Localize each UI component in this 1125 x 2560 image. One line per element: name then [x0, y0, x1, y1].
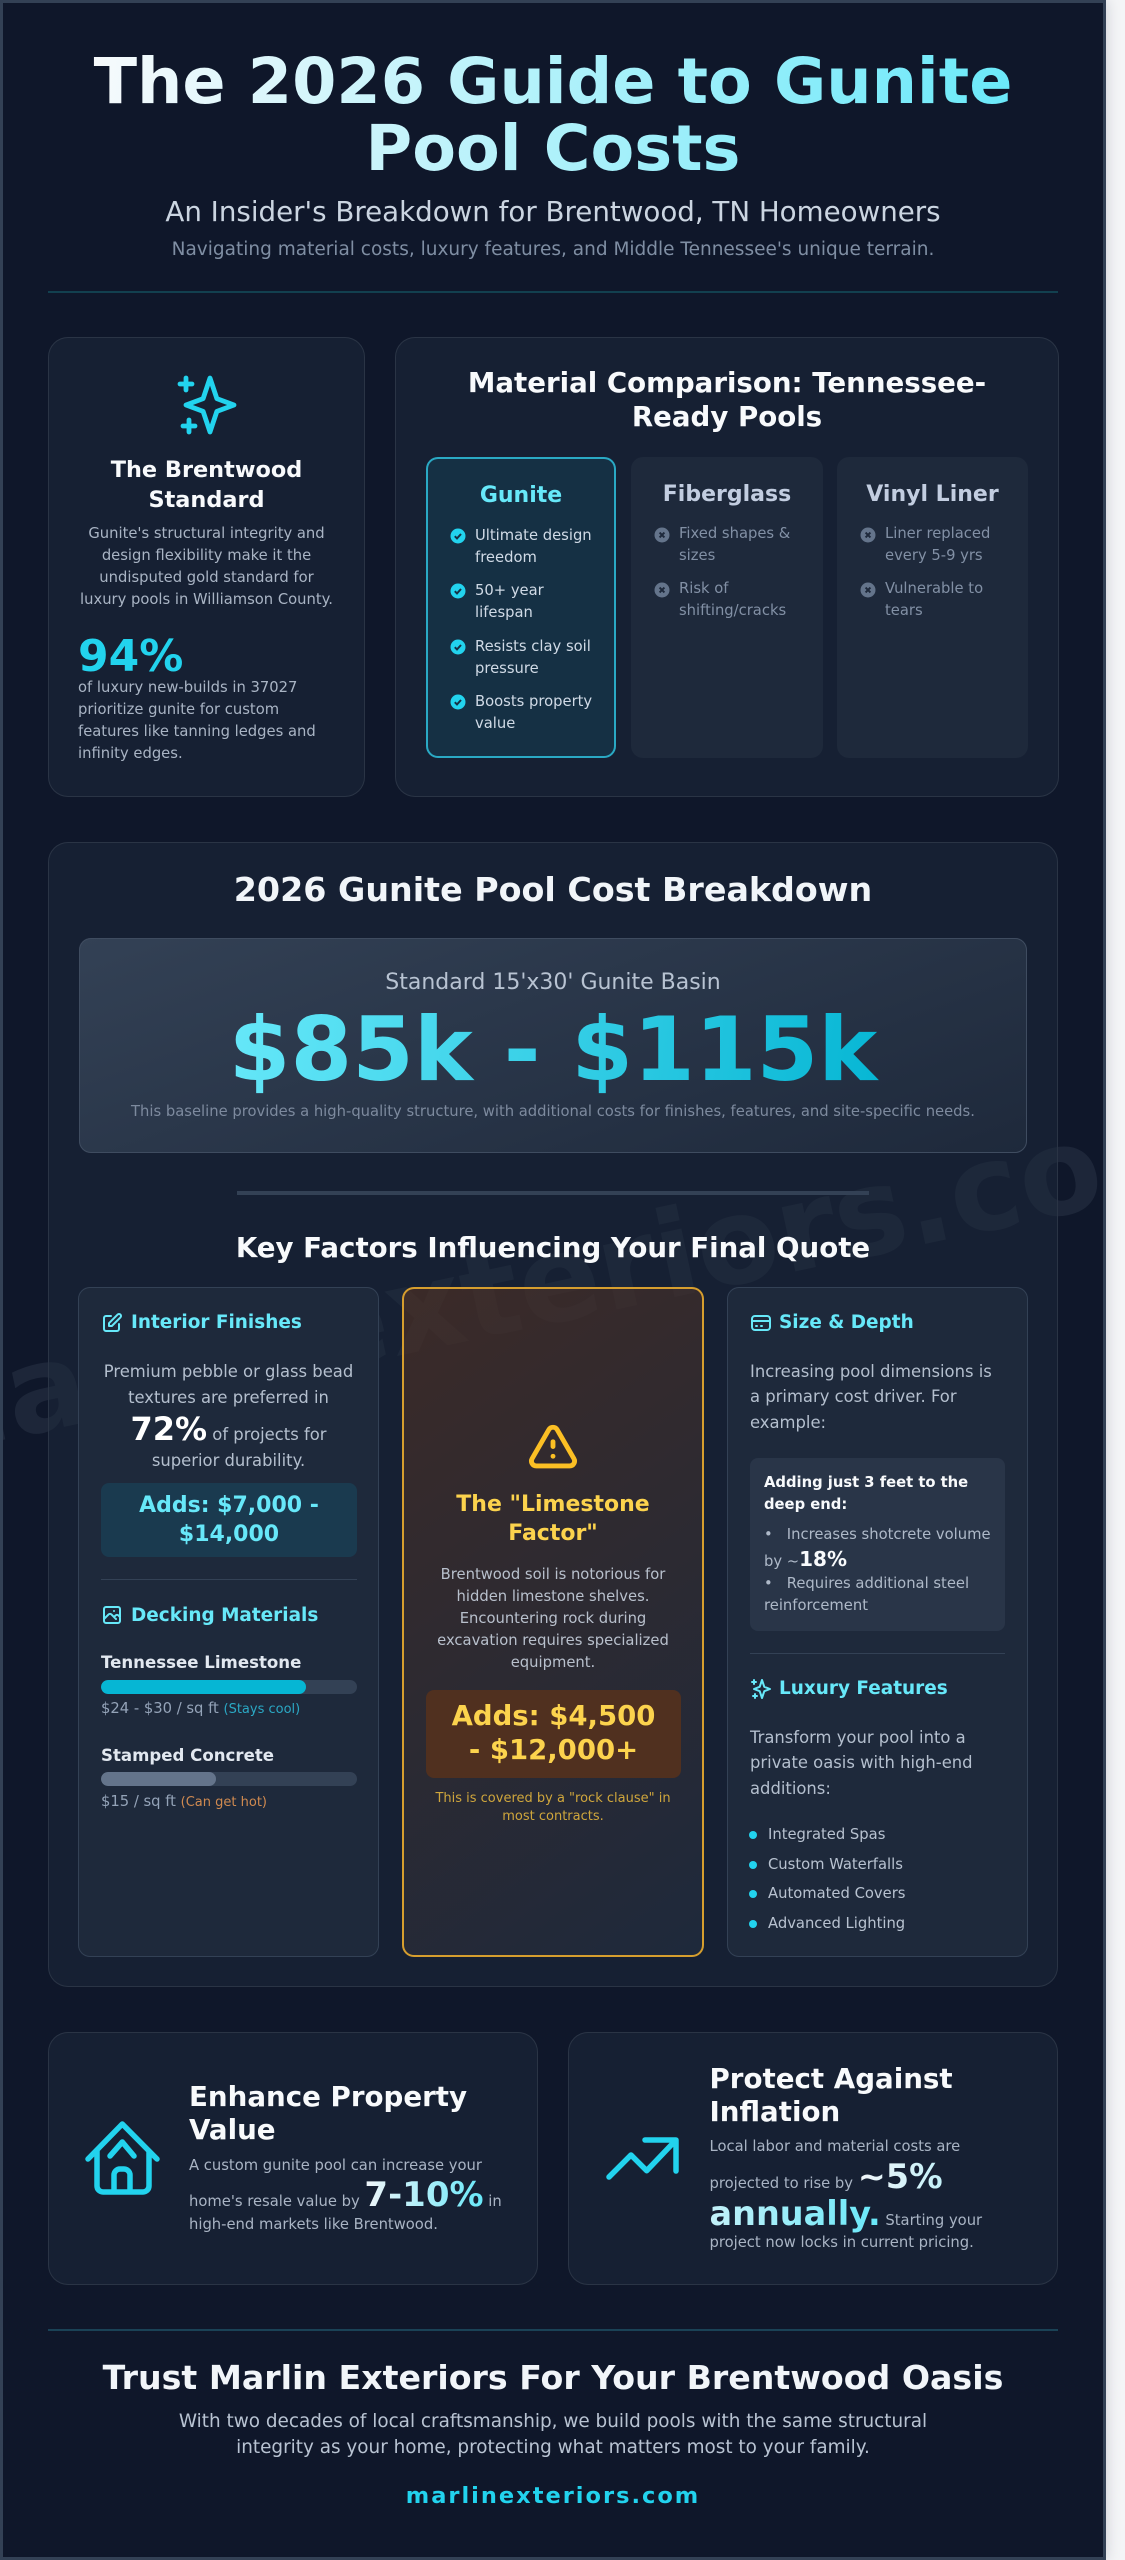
drawback: shifting [679, 580, 786, 618]
text: resale value: home's resale value by 7-10% in [189, 2175, 502, 2215]
drawback: tears: tears [885, 602, 923, 618]
bullet [749, 1860, 757, 1868]
drawback: tears [885, 580, 983, 618]
text: resale value: high-end markets like Brentwood. [189, 2216, 438, 2233]
price tag: limestone [426, 1690, 681, 1778]
text: finishes description: 72% of projects for [130, 1410, 326, 1448]
text: stat description [78, 679, 316, 762]
text: inflation: projected to rise by ~5% [710, 2157, 943, 2196]
list: gunite benefits [450, 527, 592, 732]
heading: decking materials: Decking Materials [131, 1605, 318, 1626]
text: inflation: annually. Starting your [710, 2194, 982, 2233]
text: size description: a primary cost driver. For [750, 1387, 957, 1406]
heading: protect against inflation: Inflation [710, 2095, 840, 2128]
text: gold standard description: Gunite's structural integrity and [88, 524, 325, 542]
callout heading: deep end: [764, 1496, 847, 1513]
icon: check [450, 584, 466, 598]
text: finishes description: textures are preferred in [128, 1388, 329, 1406]
text: resale value: A custom gunite pool can increase your [189, 2157, 482, 2174]
drawback: fixed shapes: Fixed shapes & [679, 524, 790, 542]
heading: material comparison [468, 366, 986, 433]
column: limestone factor [402, 1287, 704, 1957]
text: size description: example: [750, 1413, 826, 1432]
card: gunite [426, 457, 616, 758]
icon: pencil [103, 1313, 122, 1332]
bar: limestone cost [101, 1680, 357, 1694]
text: inflation: Local labor and material costs are [710, 2138, 960, 2155]
icon: house [78, 2115, 166, 2203]
callout bullets: by ~18% [764, 1547, 847, 1571]
heading: key factors: Key Factors Influencing Your Final Quote [236, 1230, 870, 1264]
heading: limestone factor: Factor" [508, 1521, 598, 1546]
heading: protect against inflation [710, 2062, 953, 2128]
text: gold standard description: undisputed gold standard for [99, 568, 314, 586]
price tag: finishes: $14,000 [179, 1522, 279, 1547]
footer heading: Trust Marlin Exteriors For Your Brentwood Oasis [103, 2358, 1003, 2396]
icon: sparkles [178, 376, 236, 434]
bullet [749, 1890, 757, 1898]
icon: photo [103, 1606, 121, 1624]
text: luxury description: private oasis with high-end [750, 1753, 973, 1772]
text: size description: Increasing pool dimensions is [750, 1362, 992, 1380]
benefit: lifespan: lifespan [475, 604, 533, 621]
callout heading: Adding just 3 feet to the [764, 1474, 968, 1491]
footer link: marlinexteriors.com [406, 2483, 700, 2509]
item: spas: Integrated Spas [768, 1826, 885, 1843]
icon: card [751, 1315, 771, 1331]
text: luxury description: Transform your pool into a [750, 1728, 966, 1746]
text: luxury description [750, 1728, 973, 1798]
drawback: fixed shapes [679, 524, 790, 564]
column: finishes and decking [78, 1287, 379, 1957]
text: gold standard description [80, 524, 333, 608]
callout: deep end [750, 1458, 1005, 1630]
benefit: lifespan: 50+ year [475, 582, 544, 599]
drawback: tears: Vulnerable to [885, 580, 983, 596]
item: covers: Automated Covers [768, 1885, 905, 1902]
benefit: design freedom: freedom [475, 549, 537, 566]
heading: the Brentwood standard [110, 457, 302, 513]
panel: cost breakdown [48, 842, 1058, 1987]
text: inflation: project now locks in current pricing. [710, 2234, 974, 2251]
list: vinyl drawbacks [860, 524, 990, 618]
heading: enhance property value [189, 2080, 467, 2146]
text: limestone description: hidden limestone shelves. [457, 1588, 649, 1605]
price: limestone: $24 - $30 / sq ft (Stays cool) [101, 1700, 300, 1717]
text: limestone description [437, 1566, 669, 1671]
text: size description [750, 1362, 992, 1432]
icon: check [450, 528, 466, 544]
benefit: property value: Boosts property [475, 693, 592, 710]
price range: $85k - $115k [229, 998, 877, 1101]
text: stat description: infinity edges. [78, 745, 183, 762]
bar: concrete cost [101, 1772, 357, 1786]
panel: the Brentwood standard [48, 337, 365, 797]
heading: protect against inflation: Protect Against [710, 2062, 953, 2095]
callout bullets: reinforcement [764, 1597, 868, 1614]
icon: cross [860, 582, 876, 598]
price box [79, 938, 1027, 1153]
price tag: finishes: Adds: $7,000 - [139, 1493, 319, 1518]
title: The 2026 Guide to Gunite [94, 44, 1012, 118]
icon: cross [860, 528, 876, 542]
bullet [749, 1920, 757, 1928]
benefit: property value [475, 693, 592, 732]
card: fiberglass [631, 457, 823, 758]
heading: interior finishes: Interior Finishes [131, 1312, 302, 1333]
text: stat description: prioritize gunite for custom [78, 701, 279, 718]
note: rock clause [435, 1791, 671, 1824]
item: waterfalls: Custom Waterfalls [768, 1856, 903, 1872]
column: size and luxury [727, 1287, 1028, 1957]
callout bullets [764, 1526, 991, 1614]
stat: 94%: 94% [78, 631, 183, 682]
drawback: shifting: Risk of [679, 580, 728, 596]
material: Tennessee limestone: Tennessee Limestone [101, 1653, 301, 1672]
text: gold standard description: luxury pools in Williamson County. [80, 590, 333, 608]
drawback: shifting: shifting/cracks [679, 602, 786, 618]
icon: cross [654, 528, 670, 542]
icon: check [450, 694, 466, 710]
title: Pool Costs [366, 112, 740, 186]
text: limestone description: equipment. [511, 1654, 595, 1671]
list: luxury features [749, 1826, 905, 1932]
note: rock clause: This is covered by a "rock clause" in [435, 1791, 671, 1806]
tagline: Navigating material costs, luxury features, and Middle Tennessee's unique terrain. [172, 238, 934, 260]
benefit: clay soil: Resists clay soil [475, 638, 591, 655]
callout bullets: • Increases shotcrete volume [764, 1526, 991, 1543]
callout heading [764, 1474, 968, 1513]
text: limestone description: excavation requires specialized [437, 1632, 669, 1649]
text: finishes description: Premium pebble or glass bead [104, 1362, 353, 1380]
footer text: integrity as your home, protecting what matters most to your family. [236, 2436, 870, 2458]
benefit: clay soil: pressure [475, 660, 539, 677]
heading: fiberglass: Fiberglass [663, 482, 791, 507]
material: stamped concrete: Stamped Concrete [101, 1746, 274, 1764]
heading: luxury features: Luxury Features [779, 1678, 948, 1699]
text: stat description: features like tanning ledges and [78, 723, 316, 740]
heading: material comparison: Material Comparison: Tennessee- [468, 366, 986, 399]
card: vinyl liner [837, 457, 1028, 758]
text: finishes description: superior durability. [152, 1450, 305, 1470]
item: lighting: Advanced Lighting [768, 1914, 905, 1932]
text: inflation [710, 2136, 982, 2254]
benefit: clay soil [475, 638, 591, 677]
price tag: limestone: Adds: $4,500 [452, 1700, 655, 1732]
benefit: property value: value [475, 715, 515, 732]
icon: sparkles small [751, 1679, 771, 1699]
heading: limestone factor [456, 1492, 650, 1546]
note: baseline: This baseline provides a high-quality structure, with additional costs for finishes, features, and site-specific needs. [131, 1103, 975, 1120]
benefit: lifespan [475, 582, 544, 621]
callout bullets: • Requires additional steel [764, 1575, 969, 1592]
drawback: fixed shapes: sizes [679, 546, 715, 564]
icon: check [450, 640, 466, 654]
text: resale value [189, 2155, 502, 2236]
benefit: design freedom: Ultimate design [475, 527, 592, 544]
subtitle: An Insider's Breakdown for Brentwood, TN Homeowners [165, 194, 941, 228]
heading: vinyl liner: Vinyl Liner [866, 482, 999, 507]
text: finishes description [104, 1362, 353, 1470]
heading: cost breakdown: 2026 Gunite Pool Cost Breakdown [234, 870, 872, 908]
text: limestone description: Encountering rock during [460, 1610, 646, 1627]
text: limestone description: Brentwood soil is notorious for [441, 1566, 665, 1583]
list: fiberglass drawbacks [654, 524, 790, 618]
title [88, 48, 1018, 182]
heading: limestone factor: The "Limestone [456, 1492, 650, 1517]
text: stat description: of luxury new-builds in 37027 [78, 679, 297, 696]
icon: warning [528, 1424, 577, 1468]
panel: inflation [568, 2032, 1058, 2285]
heading: enhance property value: Value [189, 2113, 276, 2146]
text: luxury description: additions: [750, 1779, 831, 1798]
heading: the Brentwood standard: Standard [148, 487, 265, 513]
price tag: finishes [101, 1483, 357, 1557]
footer text: With two decades of local craftsmanship, we build pools with the same structural [179, 2410, 927, 2432]
bullet [749, 1831, 757, 1839]
panel: property value [48, 2032, 538, 2285]
heading: enhance property value: Enhance Property [189, 2080, 467, 2113]
icon: trending up [598, 2115, 686, 2203]
price: concrete: $15 / sq ft (Can get hot) [101, 1793, 267, 1810]
note: rock clause: most contracts. [502, 1809, 604, 1824]
icon: cross [654, 582, 670, 598]
panel: material comparison [395, 337, 1059, 797]
heading: material comparison: Ready Pools [632, 400, 822, 433]
price tag: limestone: - $12,000+ [469, 1734, 638, 1766]
heading: the Brentwood standard: The Brentwood [111, 457, 302, 483]
label: standard basin: Standard 15'x30' Gunite Basin [385, 970, 721, 995]
heading: size and depth: Size & Depth [779, 1312, 914, 1333]
heading: gunite: Gunite [480, 483, 562, 508]
drawback: liner replaced: every 5-9 yrs [885, 546, 983, 564]
benefit: design freedom [475, 527, 592, 566]
drawback: liner replaced: Liner replaced [885, 524, 990, 542]
drawback: liner replaced [885, 524, 990, 564]
footer text [0, 2408, 1106, 2460]
text: gold standard description: design flexibility make it the [102, 546, 311, 564]
